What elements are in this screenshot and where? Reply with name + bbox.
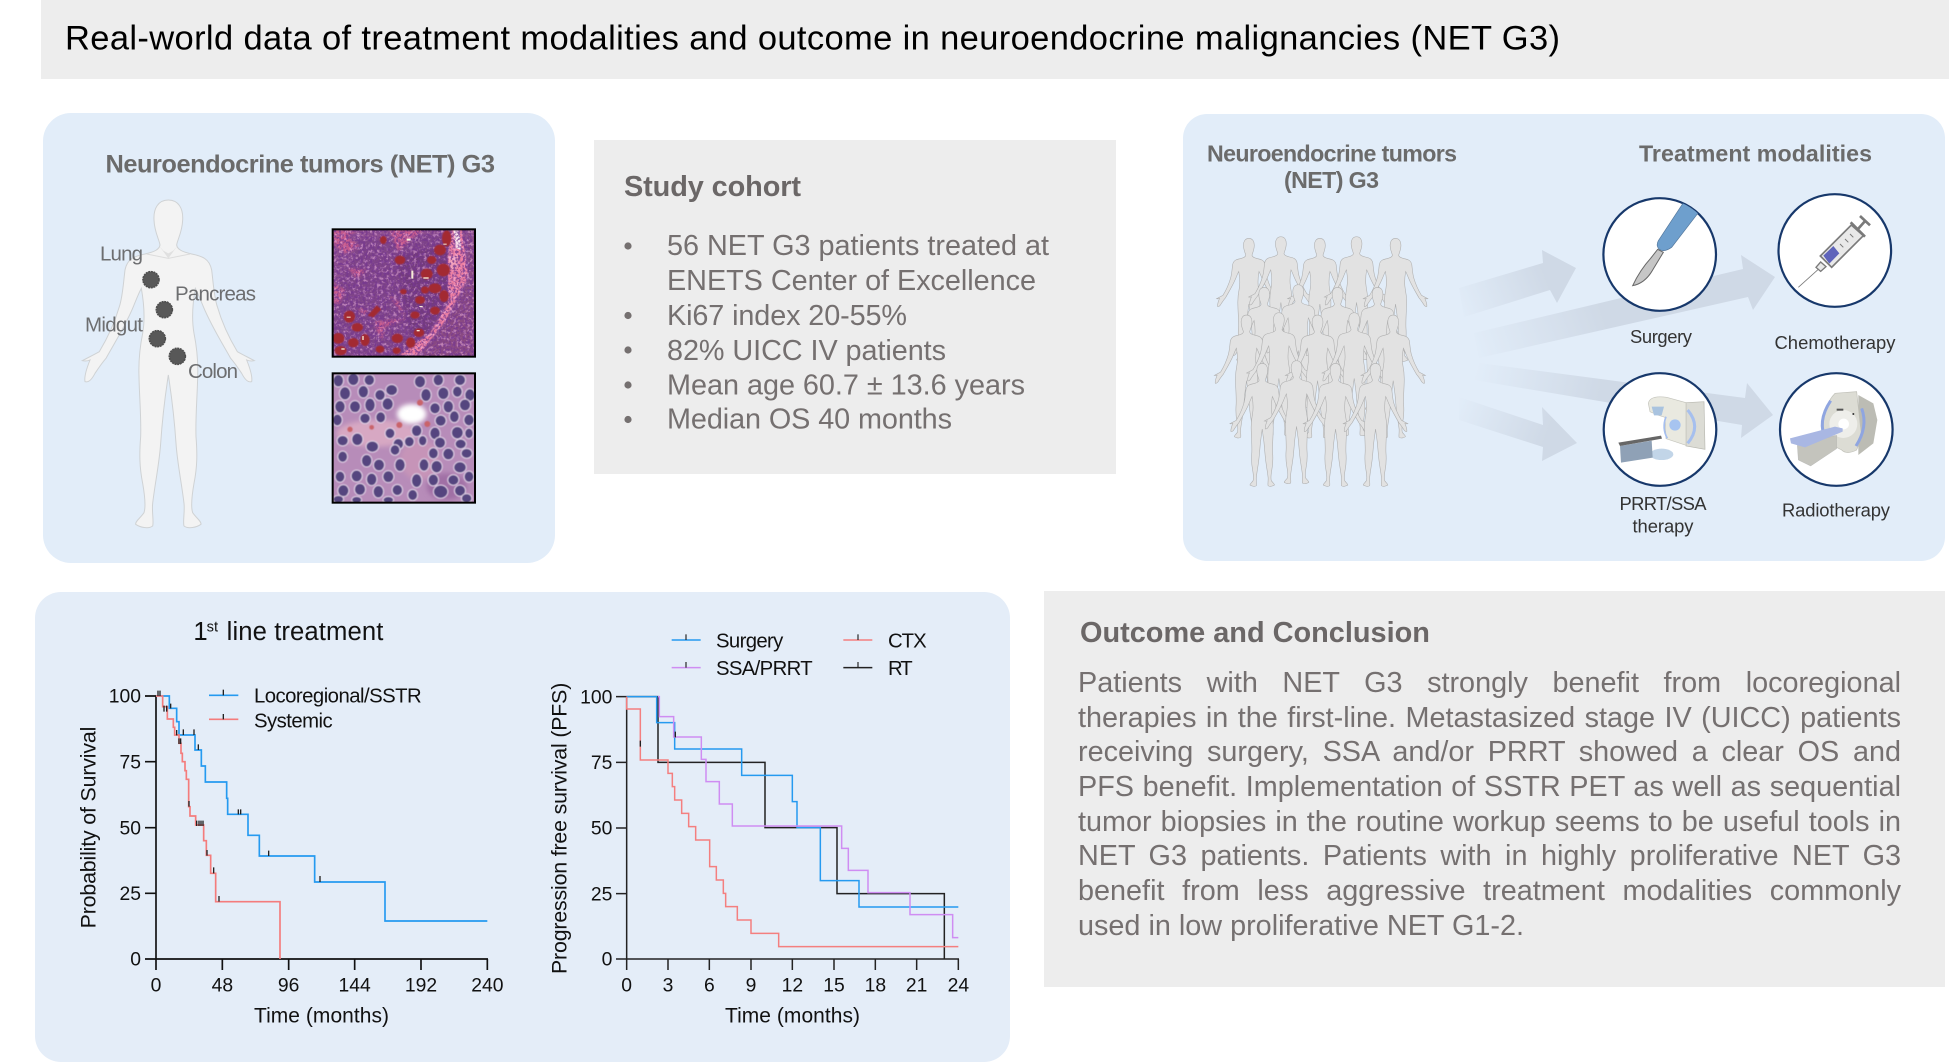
heading: Outcome and Conclusion <box>1080 617 1430 649</box>
arrow to surgery <box>1459 250 1576 317</box>
axis labels: 18 <box>865 976 886 997</box>
axis labels: 6 <box>704 976 715 997</box>
icon: PRRT/SSA therapy machine <box>1604 373 1716 486</box>
organ labels: Midgut <box>85 314 143 337</box>
icon labels: therapy <box>1632 516 1694 537</box>
chart: progression free survival <box>548 631 969 1028</box>
organ labels <box>85 243 256 383</box>
bullet list: 56 NET G3 patients treated at <box>667 230 1049 262</box>
axis labels: 48 <box>212 976 233 997</box>
axis labels: 75 <box>119 752 141 773</box>
axis labels: 50 <box>591 819 612 840</box>
legend: RT <box>888 658 913 680</box>
icon labels: PRRT/SSA <box>1620 493 1707 514</box>
chart title: 1 <box>193 618 208 646</box>
bullet list: 82% UICC IV patients <box>667 335 946 367</box>
axis labels: Time (months) <box>725 1005 860 1028</box>
legend: SSA/PRRT <box>716 658 813 680</box>
conclusion text <box>1078 667 1901 942</box>
axis labels: 75 <box>591 753 612 774</box>
heading: Study cohort <box>624 171 801 203</box>
censor marks <box>640 732 675 747</box>
bullet list: ENETS Center of Excellence <box>667 265 1036 297</box>
curve: SSA/PRRT <box>658 697 958 938</box>
legend: Locoregional/SSTR <box>254 686 422 708</box>
heading: patient group: (NET) G3 <box>1284 167 1379 193</box>
icon labels <box>1620 326 1896 537</box>
conclusion text: receiving surgery, SSA and/or PRRT showed a clear OS and <box>1078 736 1901 768</box>
curve: surgery <box>627 697 958 907</box>
heading: patient group <box>1207 141 1457 193</box>
heading: patient group: Neuroendocrine tumors <box>1207 141 1457 167</box>
axis labels: 9 <box>746 976 756 997</box>
conclusion text: Patients with NET G3 strongly benefit from locoregional <box>1078 667 1901 699</box>
axis labels: 24 <box>948 976 969 997</box>
histology: low magnification <box>332 229 475 357</box>
legend: CTX <box>888 631 927 653</box>
axis labels: Probability of Survival <box>76 727 100 928</box>
icon labels: Chemotherapy <box>1774 332 1896 353</box>
bullet list <box>624 230 1049 436</box>
heading: treatment modalities: Treatment modalities <box>1639 141 1872 167</box>
heading: Neuroendocrine tumors (NET) G3 <box>106 151 495 179</box>
conclusion text: therapies in the first-line. Metastasized stage IV (UICC) patients <box>1078 702 1901 734</box>
panel: treatment modalities <box>1183 114 1945 561</box>
curve: systemic <box>156 696 280 959</box>
panel: study cohort <box>594 140 1116 474</box>
axis labels: 21 <box>906 976 927 997</box>
arrow to chemotherapy <box>1474 255 1775 358</box>
curve: CTX <box>627 697 958 947</box>
axis labels: 25 <box>119 884 141 905</box>
axis labels: 96 <box>278 976 299 997</box>
axis labels: 100 <box>580 687 612 708</box>
tumors <box>143 272 185 364</box>
curve: RT <box>627 697 944 959</box>
censor marks <box>158 691 320 902</box>
axis labels: Progression free survival (PFS) <box>548 683 572 974</box>
axis labels: 192 <box>405 976 437 997</box>
panel: neuroendocrine tumors <box>43 113 555 563</box>
conclusion text: used in low proliferative NET G1-2. <box>1078 910 1524 942</box>
axis labels: 12 <box>782 976 803 997</box>
axis labels: 3 <box>663 976 673 997</box>
title bar <box>41 0 1949 79</box>
conclusion text: NET G3 patients. Patients with in highly proliferative NET G3 <box>1078 840 1901 872</box>
arrow to PRRT/SSA <box>1459 397 1577 461</box>
panel: outcome and conclusion <box>1044 591 1945 987</box>
arrow to radiotherapy <box>1474 363 1773 438</box>
curve: locoregional/SSTR <box>156 696 487 921</box>
axes and ticks <box>616 696 959 970</box>
histology: high magnification <box>332 373 475 504</box>
legend <box>672 631 927 680</box>
organ labels: Lung <box>100 243 143 266</box>
icon labels: Radiotherapy <box>1782 500 1891 521</box>
axis labels: 100 <box>109 687 141 708</box>
legend <box>209 686 422 732</box>
panel: survival charts <box>35 592 1010 1062</box>
icon: surgery scalpel <box>1603 198 1716 311</box>
patient crowd illustration <box>1214 237 1428 486</box>
axes and ticks <box>145 695 488 970</box>
axis labels <box>548 683 969 1028</box>
axis labels: 144 <box>339 976 371 997</box>
chart title: line treatment <box>227 618 383 646</box>
axis labels: 0 <box>602 950 612 971</box>
legend: Systemic <box>254 710 333 732</box>
axis labels: Time (months) <box>254 1005 389 1028</box>
bullet list: Ki67 index 20-55% <box>667 300 907 332</box>
chart title: st <box>207 619 218 635</box>
icon: chemotherapy syringe <box>1778 194 1891 307</box>
legend: Surgery <box>716 631 784 653</box>
conclusion text: benefit from less aggressive treatment modalities commonly <box>1078 875 1901 907</box>
organ labels: Colon <box>188 360 238 383</box>
axis labels: 50 <box>119 818 141 839</box>
chart: 1st line treatment overall survival <box>76 618 503 1028</box>
body illustration with tumors <box>82 200 254 528</box>
axis labels: 0 <box>151 976 161 997</box>
organ labels: Pancreas <box>175 283 256 306</box>
axis labels: 0 <box>130 950 141 971</box>
histology images <box>332 229 475 504</box>
bullet list: Median OS 40 months <box>667 404 952 436</box>
conclusion text: tumor biopsies in the routine workup seems to be useful tools in <box>1078 806 1901 838</box>
bullet list: Mean age 60.7 ± 13.6 years <box>667 370 1025 402</box>
icon: radiotherapy scanner <box>1780 373 1893 486</box>
axis labels: 240 <box>471 976 503 997</box>
icon labels: Surgery <box>1630 326 1693 347</box>
axis labels: 25 <box>591 884 612 905</box>
title: Real-world data of treatment modalities and outcome in neuroendocrine malignancies (NET G3) <box>65 20 1560 58</box>
conclusion text: PFS benefit. Implementation of SSTR PET as well as sequential <box>1078 771 1901 803</box>
axis labels <box>76 687 503 1028</box>
axis labels: 0 <box>621 976 632 997</box>
axis labels: 15 <box>823 976 845 997</box>
